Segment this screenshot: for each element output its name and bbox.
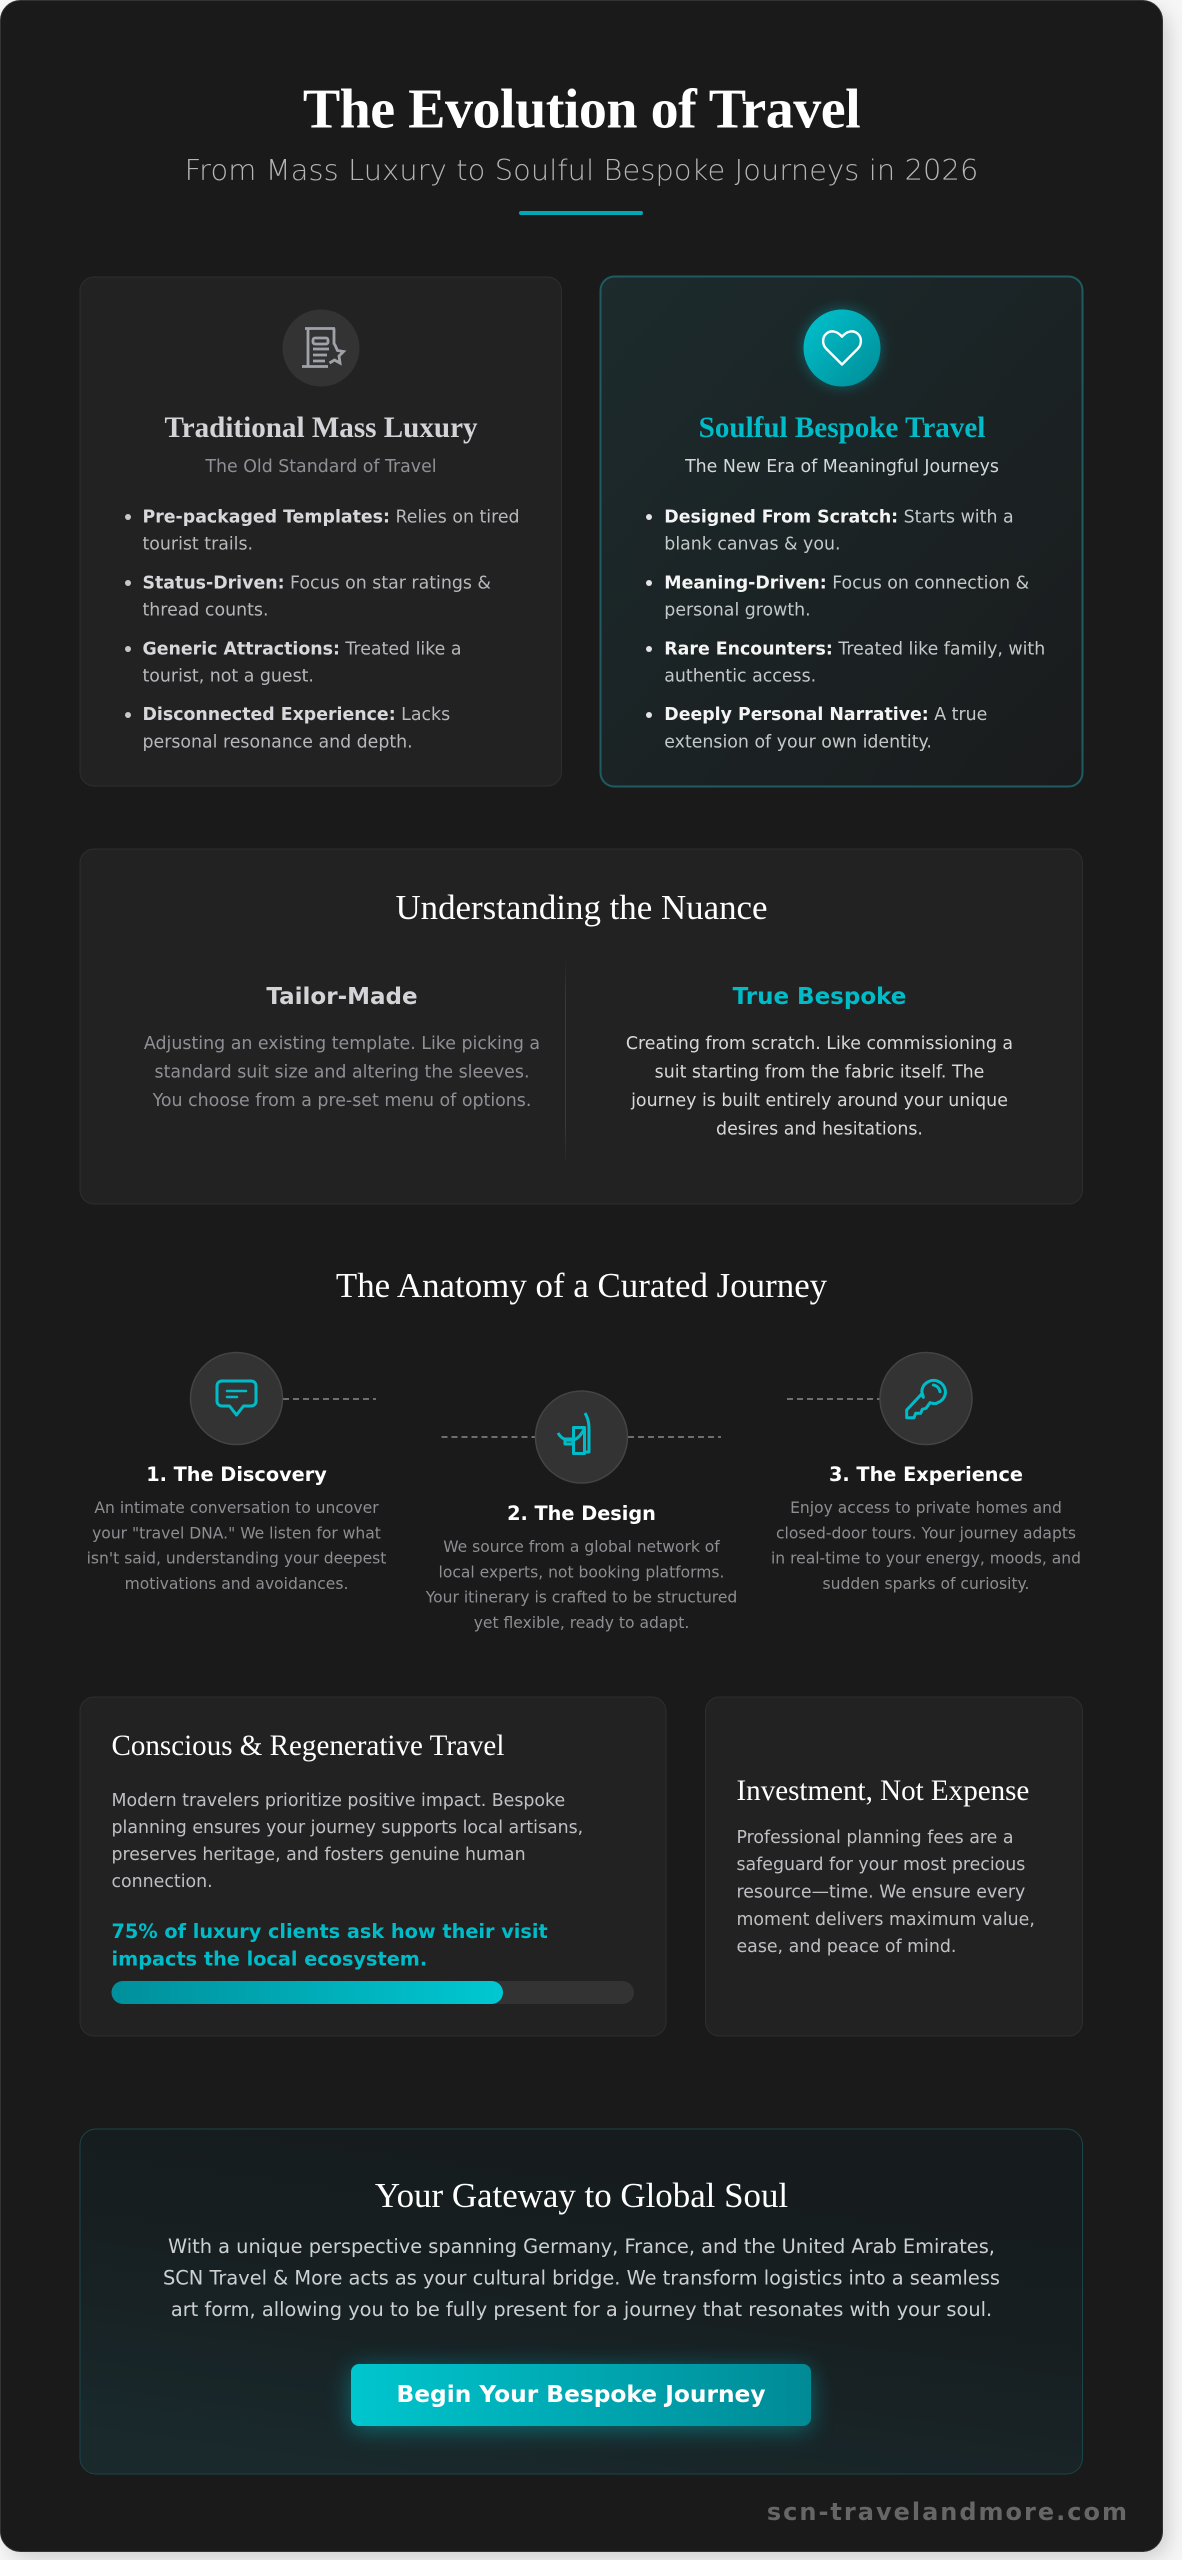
feature list: tourist trails. — [142, 535, 253, 555]
heading: Understanding the Nuance — [395, 888, 768, 927]
statistic: impacts the local ecosystem. — [112, 1948, 427, 1970]
feature list: thread counts. — [142, 601, 268, 621]
feature list: blank canvas & you. — [664, 535, 840, 555]
statistic — [112, 1920, 548, 1970]
panel: understanding the nuance — [80, 849, 1082, 1204]
column: true bespoke: Creating from scratch. Like commissioning a — [626, 1034, 1013, 1054]
feature list: Disconnected Experience: Lacks — [142, 705, 450, 725]
icon: hotel with star — [282, 310, 360, 386]
column: true bespoke: True Bespoke — [733, 984, 906, 1010]
feature list — [125, 508, 520, 752]
feature list: Pre-packaged Templates: Relies on tired — [142, 508, 520, 528]
body text: resource—time. We ensure every — [736, 1882, 1025, 1902]
step 1: the discovery — [87, 1352, 386, 1593]
feature list: personal resonance and depth. — [142, 732, 413, 752]
panel: soulful bespoke travel — [600, 276, 1082, 786]
body text: planning ensures your journey supports local artisans, — [112, 1818, 583, 1838]
feature list: Meaning-Driven: Focus on connection & — [664, 574, 1029, 594]
step 2: the design — [425, 1391, 737, 1632]
feature list: Designed From Scratch: Starts with a — [664, 508, 1014, 528]
panel: traditional mass luxury — [80, 277, 562, 786]
column: tailor-made: Tailor-Made — [266, 984, 418, 1010]
feature list: tourist, not a guest. — [142, 666, 314, 686]
feature list: extension of your own identity. — [664, 732, 932, 752]
body text — [736, 1828, 1035, 1957]
step text: motivations and avoidances. — [125, 1575, 348, 1593]
step text: We source from a global network of — [443, 1538, 720, 1556]
feature list: personal growth. — [664, 601, 811, 621]
icon: heart — [804, 310, 880, 386]
progress bar 75% — [112, 1981, 634, 2004]
feature list: Status-Driven: Focus on star ratings & — [142, 574, 491, 594]
step text: your "travel DNA." We listen for what — [92, 1524, 381, 1542]
step 3: the experience — [771, 1352, 1081, 1593]
body text: With a unique perspective spanning Germany, France, and the United Arab Emirates, — [168, 2235, 995, 2258]
feature list: Rare Encounters: Treated like family, with — [664, 639, 1045, 659]
body text: Professional planning fees are a — [736, 1828, 1013, 1848]
feature list: Deeply Personal Narrative: A true — [664, 705, 987, 725]
column: tailor-made: standard suit size and altering the sleeves. — [155, 1062, 529, 1082]
step text: local experts, not booking platforms. — [439, 1563, 724, 1581]
step text — [771, 1463, 1081, 1593]
panel: conscious and regenerative travel — [80, 1697, 666, 2036]
column: true bespoke: journey is built entirely around your unique — [630, 1091, 1008, 1111]
step text: Your itinerary is crafted to be structured — [425, 1589, 737, 1607]
heading: Soulful Bespoke Travel — [699, 412, 985, 444]
panel: investment, not expense — [706, 1697, 1082, 2036]
body text: SCN Travel & More acts as your cultural bridge. We transform logistics into a seamless — [163, 2266, 1000, 2290]
arrow: connector — [283, 1398, 376, 1400]
statistic: 75% of luxury clients ask how their visit — [112, 1920, 548, 1943]
arrow: connectors — [442, 1436, 721, 1438]
heading: anatomy of a curated journey: The Anatomy of a Curated Journey — [336, 1266, 828, 1305]
arrow: connector — [787, 1398, 880, 1400]
step text: sudden sparks of curiosity. — [823, 1575, 1029, 1593]
body text: connection. — [112, 1872, 213, 1892]
body text: ease, and peace of mind. — [736, 1937, 956, 1957]
body text: art form, allowing you to be fully present for a journey that resonates with your soul. — [171, 2298, 992, 2321]
subheading: The New Era of Meaningful Journeys — [684, 457, 999, 477]
body text: safeguard for your most precious — [736, 1855, 1025, 1875]
subheading: The Old Standard of Travel — [204, 457, 437, 477]
body text: preserves heritage, and fosters genuine human — [112, 1845, 526, 1865]
step text — [425, 1502, 737, 1632]
website watermark: scn-travelandmore.com — [767, 2498, 1129, 2526]
heading: Investment, Not Expense — [736, 1775, 1029, 1807]
step text: 2. The Design — [507, 1502, 656, 1525]
body text — [112, 1791, 583, 1892]
step text: 1. The Discovery — [146, 1463, 327, 1486]
step text: An intimate conversation to uncover — [94, 1499, 379, 1517]
column: true bespoke — [626, 984, 1013, 1140]
icon: chat bubble — [190, 1352, 282, 1444]
step text: yet flexible, ready to adapt. — [474, 1614, 689, 1632]
icon: key — [880, 1352, 972, 1444]
heading: Your Gateway to Global Soul — [375, 2176, 788, 2215]
body text: moment delivers maximum value, — [736, 1910, 1035, 1930]
subtitle: From Mass Luxury to Soulful Bespoke Journeys in 2026 — [185, 153, 978, 187]
button — [351, 2364, 811, 2430]
step text: Enjoy access to private homes and — [790, 1499, 1062, 1517]
column: tailor-made — [144, 984, 540, 1111]
feature list: authentic access. — [664, 666, 816, 686]
feature list: Generic Attractions: Treated like a — [142, 639, 462, 659]
feature list — [646, 508, 1045, 752]
step text: 3. The Experience — [829, 1463, 1023, 1486]
body text — [163, 2235, 1000, 2321]
title: The Evolution of Travel — [303, 78, 860, 140]
column: true bespoke: desires and hesitations. — [716, 1120, 923, 1140]
icon: design tools — [536, 1391, 628, 1483]
column: true bespoke: suit starting from the fabric itself. The — [655, 1062, 984, 1082]
body text: Modern travelers prioritize positive impact. Bespoke — [112, 1791, 565, 1811]
heading: Traditional Mass Luxury — [164, 412, 478, 444]
button: Begin Your Bespoke Journey — [396, 2381, 766, 2408]
step text: in real-time to your energy, moods, and — [771, 1550, 1081, 1568]
step text: closed-door tours. Your journey adapts — [776, 1524, 1076, 1542]
panel: call to action — [80, 2129, 1082, 2474]
step text — [87, 1463, 386, 1593]
accent underline — [519, 211, 643, 215]
step text: isn't said, understanding your deepest — [87, 1550, 386, 1568]
column: tailor-made: Adjusting an existing template. Like picking a — [144, 1034, 540, 1054]
heading: Conscious & Regenerative Travel — [112, 1730, 504, 1762]
column: tailor-made: You choose from a pre-set menu of options. — [152, 1091, 531, 1111]
header — [185, 78, 978, 215]
